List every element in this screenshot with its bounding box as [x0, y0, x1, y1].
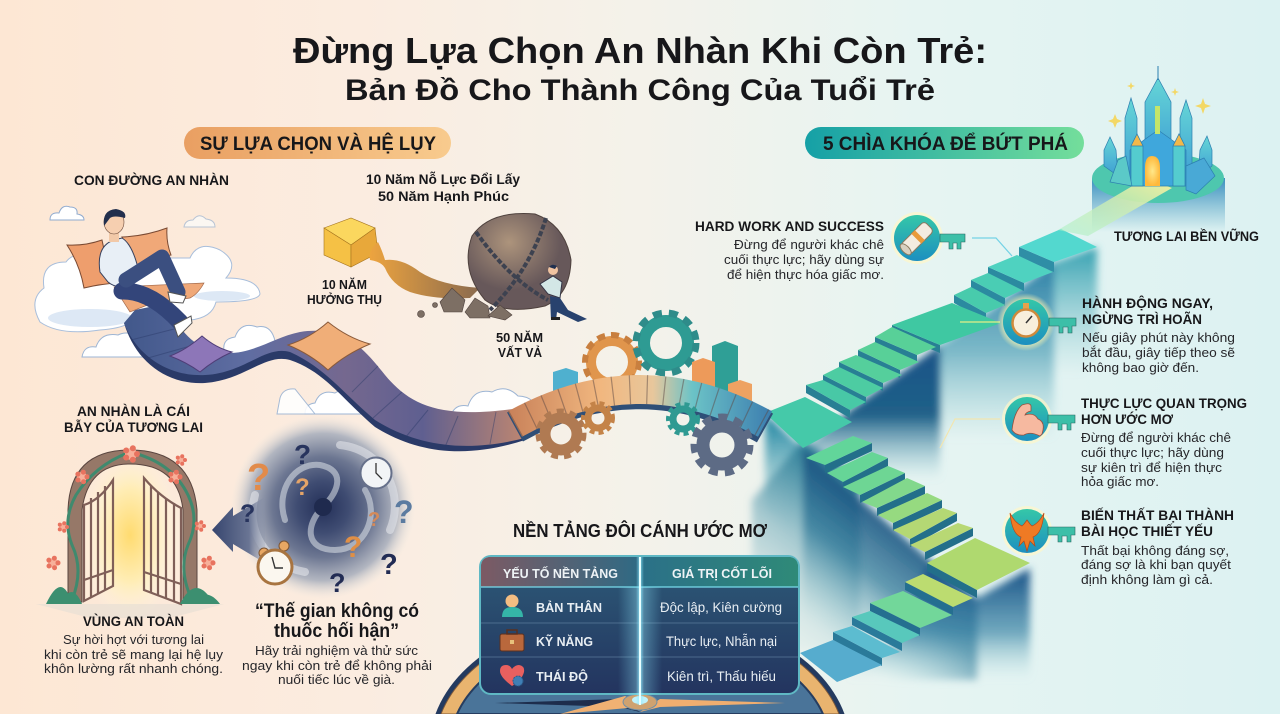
regret quote text — [242, 600, 432, 687]
row: skills: Thực lực, Nhẫn nại — [666, 634, 777, 649]
question marks: ? — [394, 494, 414, 530]
sparkles — [1108, 82, 1211, 128]
castle plinth — [1092, 178, 1225, 232]
key item 1: HARD WORK AND SUCCESS — [695, 219, 884, 234]
regret quote text: ngay khi còn trẻ để không phải — [242, 659, 432, 673]
castle towers — [1104, 78, 1215, 194]
key item 1: Đừng để người khác chê — [734, 238, 884, 252]
flight: upper — [806, 229, 1097, 418]
gold cube — [324, 218, 378, 267]
rubble — [418, 288, 512, 320]
icon: phoenix key — [1002, 506, 1075, 556]
key item 3: THỰC LỰC QUAN TRỌNG — [1081, 396, 1247, 411]
man — [99, 209, 192, 337]
road pillows — [170, 322, 370, 372]
castle: future — [1058, 66, 1225, 236]
question marks: ? — [294, 439, 311, 470]
regret quote text: thuốc hối hận” — [274, 620, 399, 642]
glow — [80, 450, 180, 620]
heading pill: choices and consequences: SỰ LỰA CHỌN VÀ HỆ LỤY — [200, 131, 436, 155]
small clouds upper left — [50, 206, 215, 227]
title: Bản Đồ Cho Thành Công Của Tuổi Trẻ — [345, 74, 935, 107]
label: 50 years hardship: 50 NĂM — [496, 330, 543, 345]
illustration: gold cube, sand and boulder — [324, 213, 587, 322]
key item 4: đáng sợ là khi bạn quyết — [1081, 558, 1232, 572]
label: 10 years enjoyment: 10 NĂM — [322, 277, 367, 292]
question marks — [240, 439, 414, 598]
key item 4: BÀI HỌC THIẾT YẾU — [1081, 524, 1213, 539]
key item 3 — [940, 394, 1247, 489]
key item 3: Đừng để người khác chê — [1081, 431, 1231, 445]
row: attitude: Kiên trì, Thấu hiếu — [667, 669, 776, 684]
alarm clock — [258, 541, 292, 584]
label: 50 years hardship: VẤT VẢ — [498, 345, 542, 360]
key item 3: sự kiên trì để hiện thực — [1081, 461, 1222, 475]
flight: lower — [800, 574, 973, 682]
key item 4: BIẾN THẤT BẠI THÀNH — [1081, 508, 1234, 523]
key item 2: Nếu giây phút này không — [1082, 331, 1235, 345]
heading: 10 years effort: 10 Năm Nỗ Lực Đổi Lấy — [366, 172, 520, 187]
key item 1 — [695, 212, 1012, 282]
left door — [84, 480, 113, 601]
question marks: ? — [329, 568, 346, 598]
landing — [765, 397, 852, 448]
gears and blocks — [553, 313, 752, 415]
key item 4: định không làm gì cả. — [1081, 573, 1213, 587]
key item 2: không bao giờ đến. — [1082, 361, 1199, 375]
key item 4: Thất bại không đáng sợ, — [1081, 544, 1229, 558]
table: foundation values — [480, 556, 799, 705]
label: 50 years hardship — [496, 330, 543, 360]
road joints — [131, 328, 496, 447]
icon: stopwatch key — [960, 293, 1076, 351]
icon: scroll key — [891, 212, 1012, 264]
chains — [476, 218, 548, 310]
regret quote text: Hãy trải nghiệm và thử sức — [255, 644, 418, 658]
key item 3: hỏa giấc mơ. — [1081, 475, 1159, 489]
heading: comfort trap — [64, 404, 203, 435]
label: 10 years enjoyment: HƯỞNG THỤ — [307, 292, 382, 307]
flight: middle — [806, 436, 1030, 598]
right door — [144, 478, 181, 604]
heading: comfort trap: BẪY CỦA TƯƠNG LAI — [64, 420, 203, 435]
heading: 10 years effort: 50 Năm Hạnh Phúc — [378, 189, 510, 204]
illustration: garden gate — [36, 448, 224, 620]
staircase — [752, 229, 1097, 684]
question marks: ? — [368, 509, 380, 531]
row: self: BẢN THÂN — [536, 600, 602, 615]
row: attitude — [500, 665, 776, 686]
row: self: Độc lập, Kiên cường — [660, 600, 782, 615]
heading: 10 years effort — [366, 172, 520, 204]
title — [293, 30, 987, 107]
regret quote text: nuối tiếc lúc về già. — [278, 673, 395, 687]
heading pill: choices and consequences — [184, 127, 451, 159]
label: 10 years enjoyment — [307, 277, 382, 307]
comfort zone text — [44, 614, 224, 676]
big cloud — [35, 246, 260, 332]
key item 1: cuối thực lực; hãy dùng sự — [724, 253, 884, 267]
heading pill: five keys — [805, 127, 1084, 159]
label: future: TƯƠNG LAI BỀN VỮNG — [1114, 229, 1259, 244]
heading pill: five keys: 5 CHÌA KHÓA ĐỂ BỨT PHÁ — [823, 131, 1068, 155]
table header: YẾU TỐ NỀN TẢNG — [503, 566, 618, 581]
bridge — [515, 390, 765, 428]
table header — [503, 566, 772, 581]
vines and leaves — [68, 452, 194, 600]
compass — [436, 609, 844, 714]
comfort zone text: Sự hời hợt với tương lai — [63, 633, 204, 647]
vortex — [231, 415, 415, 599]
arrow — [212, 497, 265, 563]
key item 1: để hiện thực hóa giấc mơ. — [727, 268, 884, 282]
comfort zone text: khôn lường rất nhanh chóng. — [44, 662, 223, 676]
comfort zone text: VÙNG AN TOÀN — [83, 614, 184, 629]
key item 2 — [960, 293, 1235, 375]
arch — [68, 450, 197, 602]
key item 2: bắt đầu, giây tiếp theo sẽ — [1082, 345, 1235, 360]
question marks: ? — [240, 500, 255, 528]
heading: easy path: CON ĐƯỜNG AN NHÀN — [74, 173, 229, 188]
question marks: ? — [295, 474, 310, 501]
winding road — [124, 303, 525, 451]
question marks: ? — [247, 457, 270, 499]
gears under bridge — [538, 403, 750, 473]
question marks: ? — [380, 549, 398, 581]
heading: dream wings foundation: NỀN TẢNG ĐÔI CÁNH ƯỚC MƠ — [513, 520, 768, 541]
key item 2: HÀNH ĐỘNG NGAY, — [1082, 296, 1213, 311]
question marks: ? — [344, 531, 362, 564]
row: skills — [500, 630, 777, 651]
table header: GIÁ TRỊ CỐT LÕI — [672, 566, 772, 581]
light beam — [618, 557, 662, 705]
title: Đừng Lựa Chọn An Nhàn Khi Còn Trẻ: — [293, 30, 987, 71]
sand — [370, 242, 480, 298]
flowers — [48, 448, 213, 568]
man on pillows — [67, 209, 204, 337]
pushing man — [540, 265, 587, 322]
key item 4 — [1002, 506, 1234, 587]
key item 3: HƠN ƯỚC MƠ — [1081, 412, 1173, 427]
row: attitude: THÁI ĐỘ — [536, 669, 588, 684]
heading: comfort trap: AN NHÀN LÀ CÁI — [77, 404, 190, 419]
clock — [360, 458, 392, 488]
light path — [1058, 178, 1172, 236]
row: skills: KỸ NĂNG — [536, 634, 593, 649]
key item 3: cuối thực lực; hãy dùng — [1081, 446, 1224, 460]
comfort zone text: khi còn trẻ sẽ mang lại hệ lụy — [44, 648, 224, 662]
regret quote text: “Thế gian không có — [255, 600, 419, 622]
boulder — [468, 213, 571, 309]
row: self — [502, 594, 782, 617]
pillows — [67, 240, 118, 288]
stair walls — [752, 247, 1097, 684]
illustration: vortex of regret — [212, 415, 415, 599]
icon: muscle key — [940, 394, 1075, 448]
road clouds — [82, 325, 542, 418]
key item 2: NGỪNG TRÌ HOÃN — [1082, 312, 1202, 327]
